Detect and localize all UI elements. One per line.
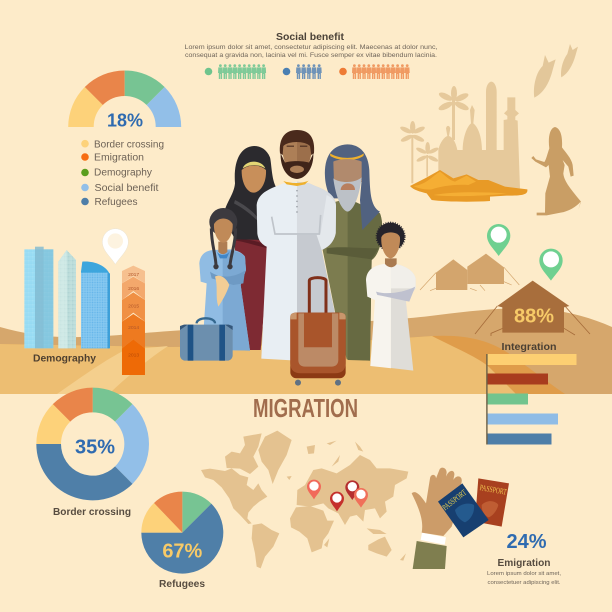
skyscrapers [24, 247, 110, 348]
callout: emigration 24%: Lorem ipsum dolor sit amet, [487, 571, 561, 577]
bar chart: integration: Integration [502, 342, 556, 353]
timeline chevrons with years: 2013 [128, 352, 139, 358]
bar chart: integration [486, 342, 576, 444]
icon: white location pin [102, 229, 128, 264]
desert dunes ground [0, 308, 612, 394]
palm tree 2 [399, 121, 426, 183]
timeline chevrons with years: 2014 [128, 325, 139, 331]
timeline chevrons with years: 2017 [128, 272, 139, 278]
pie chart: 67%: 67% [162, 540, 203, 562]
half donut chart 18%: 18% [107, 110, 143, 130]
legend: Emigration [94, 152, 144, 164]
elder man in green robe [323, 144, 382, 361]
pie chart: 67% [141, 492, 223, 574]
label: refugees: Refugees [159, 579, 205, 590]
woman in black hijab [223, 146, 277, 350]
blue passport: PASSPORT [441, 488, 468, 512]
donut chart: 35%: 35% [75, 436, 115, 458]
brown wheeled luggage [290, 278, 346, 386]
family of migrants [180, 130, 416, 386]
mosque and minarets [438, 82, 520, 188]
half donut chart 18% [68, 70, 181, 130]
building 3 [81, 262, 110, 348]
donut chart: 35% [36, 388, 149, 500]
heading: social benefit: consequat a gravida non, lacinia vel mi. Fusce semper ex vitae bibendum lacinia. [185, 52, 437, 59]
title: migration: MIGRATION [253, 393, 358, 423]
map location pins [307, 480, 368, 511]
callout: emigration 24%: Emigration [498, 558, 550, 569]
blue people group [283, 64, 322, 79]
heading: social benefit: Social benefit [276, 31, 345, 43]
central man in white thobe [257, 130, 336, 362]
boy in white robe [366, 223, 416, 371]
tent back left [420, 259, 477, 291]
heading: social benefit: Lorem ipsum dolor sit amet, consectetur adipiscing elit. Maecenas at dolor nunc, [184, 44, 438, 51]
sleeve and cuff [413, 533, 447, 569]
sand pile [410, 170, 527, 202]
legend: Demography [94, 168, 152, 178]
orange people group [339, 64, 410, 79]
silhouette: city with palms [399, 82, 520, 188]
label: border crossing: Border crossing [53, 507, 131, 518]
legend [81, 140, 164, 208]
tent front with 88%: 88% [514, 306, 554, 328]
girl in blue dress [199, 208, 250, 351]
people pictogram row [205, 64, 410, 79]
tents [420, 254, 590, 336]
blue suitcase [180, 318, 233, 361]
palm tree 3 [415, 142, 439, 177]
legend: Social benefit [94, 183, 159, 194]
building 2 [58, 250, 76, 348]
tent back right [467, 254, 519, 291]
callout: emigration 24% [487, 531, 561, 586]
tent front with 88% [475, 281, 590, 336]
green people group [205, 64, 266, 79]
silhouette: falling bombs [534, 44, 578, 98]
legend: Refugees [94, 197, 138, 208]
timeline chevrons with years: 2015 [128, 303, 139, 309]
silhouette: running woman [531, 127, 581, 215]
red passport: PASSPORT [479, 483, 507, 497]
icon: green location pins [487, 224, 563, 281]
world map [201, 431, 408, 568]
callout: emigration 24%: 24% [506, 531, 547, 553]
heading: social benefit [184, 31, 438, 59]
hand [412, 468, 462, 536]
timeline chevrons with years [122, 266, 145, 375]
building 1 [24, 247, 53, 348]
label: demography: Demography [33, 352, 96, 364]
legend: Border crossing [94, 140, 164, 150]
callout: emigration 24%: consectetuer adipiscing elit. [488, 580, 561, 586]
timeline chevrons with years: 2016 [128, 286, 139, 292]
palm tree 1 [437, 86, 470, 140]
hand holding passports [412, 468, 509, 569]
